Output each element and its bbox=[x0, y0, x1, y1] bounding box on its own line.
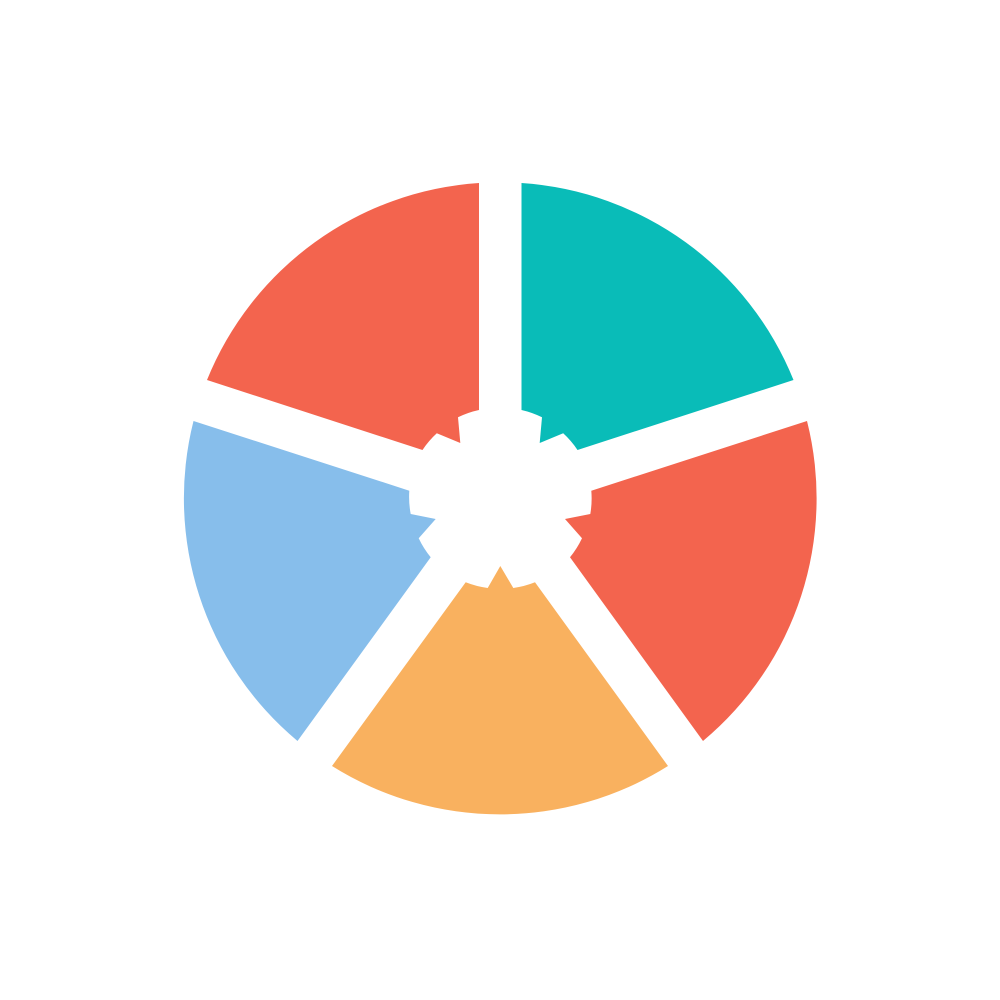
segment: top right (teal) bbox=[522, 183, 794, 450]
segment: top left (red) bbox=[207, 183, 479, 450]
segment: bottom (orange) bbox=[332, 566, 668, 814]
segment: lower left (blue) bbox=[184, 421, 436, 741]
segment: lower right (red) bbox=[565, 421, 817, 741]
